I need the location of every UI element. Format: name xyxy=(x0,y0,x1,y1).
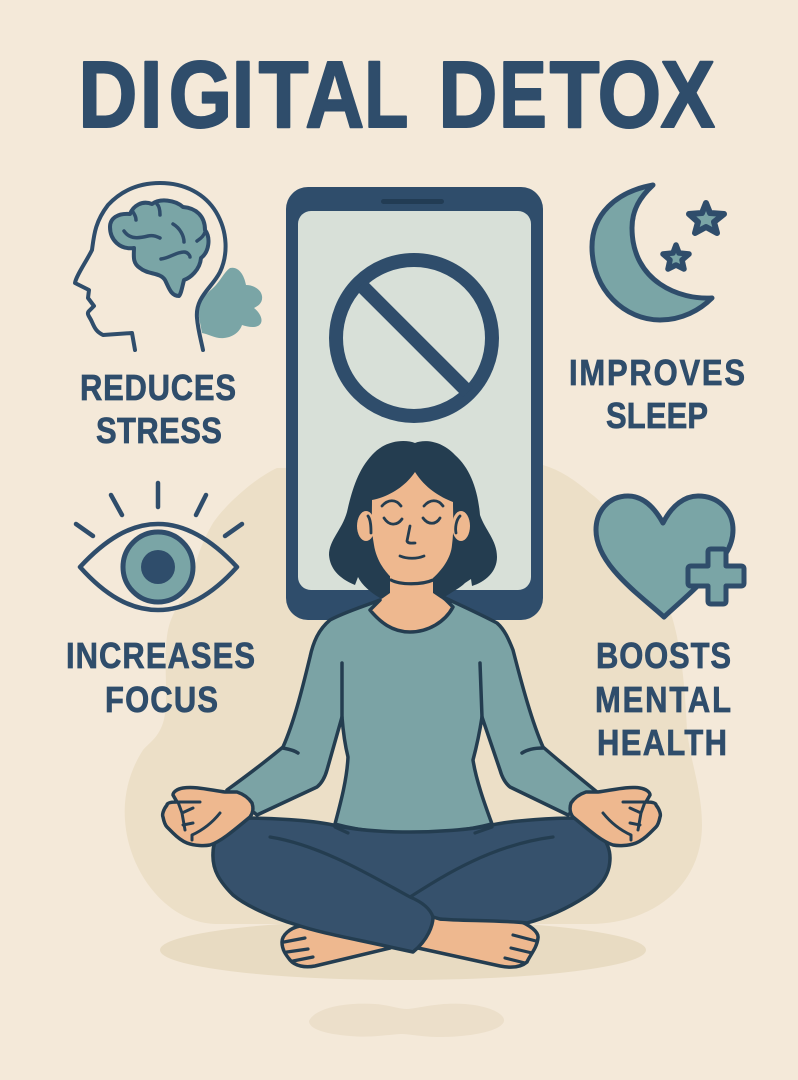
shirt xyxy=(227,597,597,833)
title: TOX xyxy=(550,41,715,147)
neck xyxy=(366,575,458,640)
title: L xyxy=(364,41,408,147)
face xyxy=(372,472,453,582)
pants creases xyxy=(270,827,553,917)
label: improves sleep: IMPROVES xyxy=(569,354,745,394)
lower shadow xyxy=(309,1004,504,1037)
meditating person xyxy=(163,441,660,967)
title: D xyxy=(438,41,497,147)
title: E xyxy=(499,41,547,147)
right foot xyxy=(418,916,538,967)
pants xyxy=(213,818,610,952)
right hand xyxy=(570,787,660,846)
label: reduces stress: REDUCES xyxy=(80,369,236,409)
label: reduces stress xyxy=(80,369,236,452)
label: reduces stress: STRESS xyxy=(96,412,222,452)
icon: head with brain xyxy=(75,183,262,350)
title xyxy=(78,41,715,147)
label: boosts mental health: MENTAL xyxy=(595,681,731,721)
ears xyxy=(357,511,470,541)
toes xyxy=(284,935,536,963)
chin line xyxy=(391,580,433,584)
left hand xyxy=(163,787,253,846)
facial features xyxy=(368,501,460,558)
floor shadow xyxy=(160,920,646,980)
icon: moon and stars xyxy=(592,185,724,320)
label: increases focus: FOCUS xyxy=(105,681,218,721)
label: boosts mental health: BOOSTS xyxy=(596,637,731,677)
left foot xyxy=(282,926,390,967)
label: improves sleep: SLEEP xyxy=(606,397,708,437)
label: increases focus xyxy=(66,637,255,721)
arm creases xyxy=(283,663,543,753)
hair xyxy=(329,441,497,598)
icon: phone with prohibition sign xyxy=(286,187,543,620)
label: boosts mental health: HEALTH xyxy=(597,724,727,764)
icon: eye with rays xyxy=(76,483,242,610)
icon: heart with plus xyxy=(596,496,744,617)
title: DIGITA xyxy=(78,41,364,147)
label: boosts mental health xyxy=(595,637,731,764)
background blob xyxy=(125,465,702,924)
label: increases focus: INCREASES xyxy=(66,637,255,677)
label: improves sleep xyxy=(569,354,745,437)
